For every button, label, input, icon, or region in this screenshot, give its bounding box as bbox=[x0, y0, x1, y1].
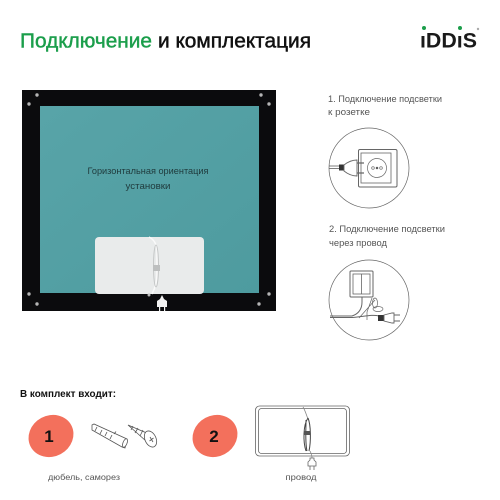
icon: box with cable bbox=[256, 406, 350, 470]
text: connection option 2 bbox=[329, 224, 445, 248]
white box with cable bbox=[95, 237, 204, 311]
caption: cable: провод bbox=[286, 472, 317, 482]
title bbox=[20, 30, 311, 52]
icon: switch and cable with scissors bbox=[329, 260, 409, 340]
logo: IDDIS: ıDDıS bbox=[420, 30, 477, 52]
mirror frame bbox=[22, 90, 276, 311]
orientation label: Горизонтальная ориентация bbox=[88, 166, 208, 177]
mounting screws bbox=[27, 93, 271, 306]
mirror teal back bbox=[40, 106, 259, 293]
icon: screw bbox=[128, 425, 159, 449]
caption: wall plug, screw: дюбель, саморез bbox=[48, 472, 120, 482]
text: connection option 1: к розетке bbox=[328, 107, 370, 117]
title: и комплектация bbox=[158, 30, 311, 52]
text: connection option 2: через провод bbox=[329, 238, 388, 248]
orientation label bbox=[88, 166, 208, 192]
heading: kit contents: В комплект входит: bbox=[20, 389, 116, 400]
orientation label: установки bbox=[126, 181, 170, 192]
text: connection option 1 bbox=[328, 94, 442, 117]
icon: plug into socket bbox=[329, 128, 409, 208]
badge: 2: 2 bbox=[209, 427, 219, 446]
badge: 1: 1 bbox=[44, 427, 54, 446]
text: connection option 1: 1. Подключение подсветки bbox=[328, 94, 442, 104]
text: connection option 2: 2. Подключение подсветки bbox=[329, 224, 445, 234]
badge: 2 bbox=[185, 407, 245, 465]
panel: mirror rear view bbox=[22, 90, 276, 311]
title: Подключение bbox=[20, 30, 152, 52]
badge: 1 bbox=[21, 407, 81, 465]
icon: wall plug bbox=[92, 424, 129, 448]
